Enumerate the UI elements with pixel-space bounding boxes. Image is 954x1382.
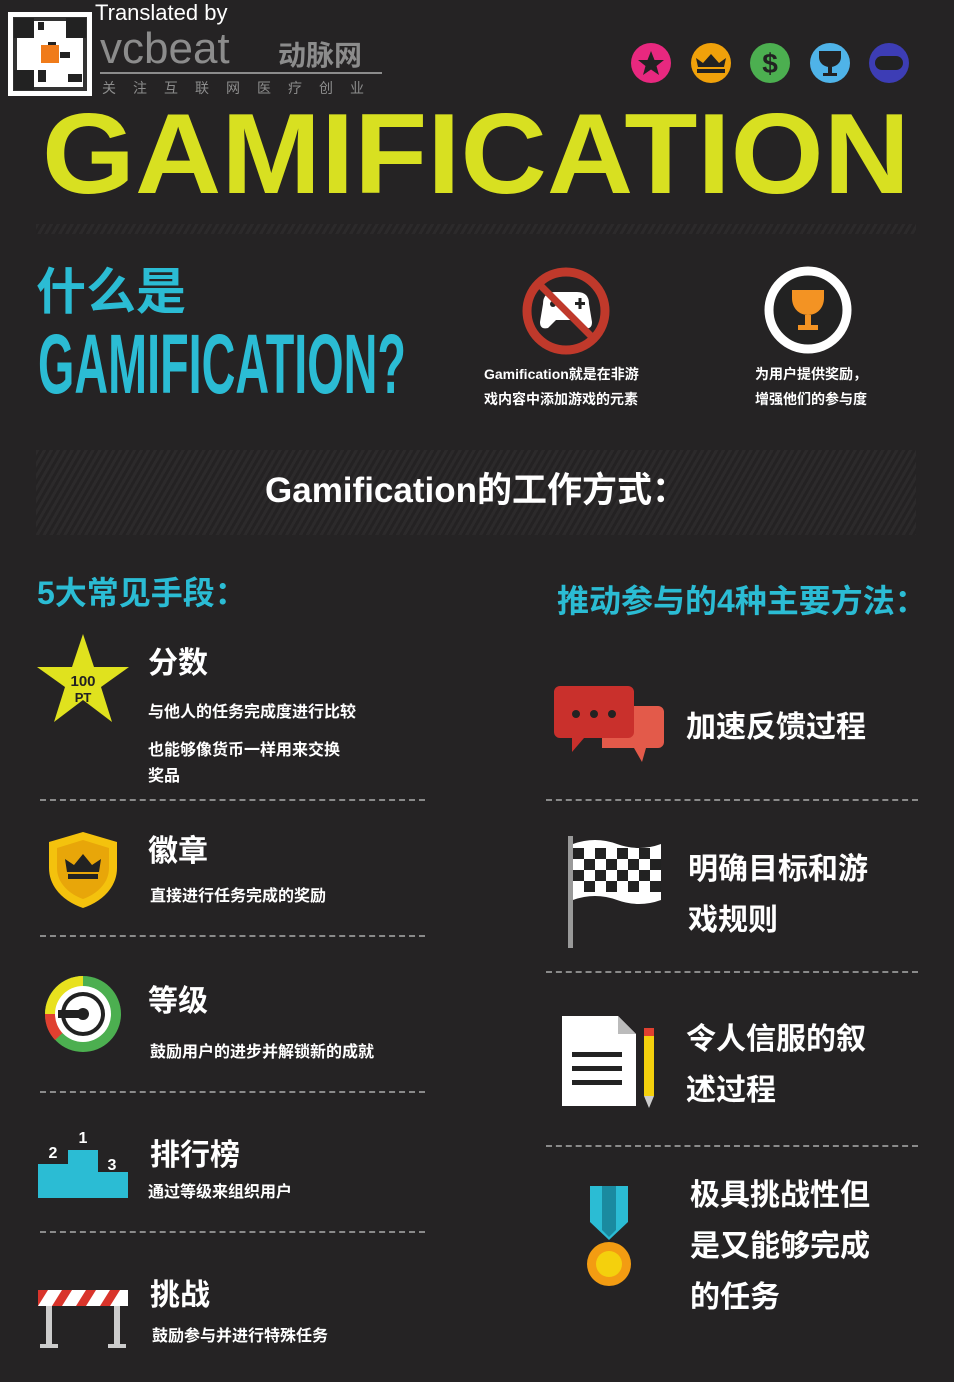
icon row [631,43,909,83]
item: badges: 直接进行任务完成的奖励 [150,888,326,905]
method: challenging tasks: 极具挑战性但 [690,1179,870,1212]
item: challenges [38,1279,328,1348]
heading: 4 methods: 推动参与的4种主要方法： [557,583,927,619]
banner: how it works [36,450,916,535]
QR code [8,12,92,96]
icon row: $ [762,48,778,79]
method: clear goals: 戏规则 [688,904,778,937]
item: leaderboard: 排行榜 [150,1139,240,1172]
item: levels: 鼓励用户的进步并解锁新的成就 [150,1044,374,1061]
text: rewards [755,366,867,407]
item: leaderboard: 2 [49,1145,58,1162]
method: clear goals: 明确目标和游 [688,853,868,886]
method: challenging tasks: 是又能够完成 [690,1230,870,1263]
item: levels [45,976,374,1061]
item: challenges: 鼓励参与并进行特殊任务 [152,1328,328,1345]
text: rewards: 为用户提供奖励， [755,366,867,382]
logo: vcbeat: 关注互联网医疗创业 [102,80,381,96]
item: points: 100 [70,673,96,690]
method: clear goals [568,836,868,948]
credit: translated by: Translated by [95,0,227,25]
method: fast feedback: 加速反馈过程 [686,711,866,744]
text: definition: Gamification就是在非游 [484,366,639,382]
item: leaderboard: 1 [79,1130,88,1147]
method: challenging tasks: 的任务 [690,1281,780,1314]
method: fast feedback [554,686,866,762]
item: leaderboard: 3 [108,1157,117,1174]
item: levels: 等级 [148,985,208,1018]
logo: vcbeat [100,24,382,96]
icon: no games [522,268,610,354]
text: rewards: 增强他们的参与度 [755,391,867,407]
heading: what is gamification: 什么是 [36,264,186,320]
item: badges: 徽章 [148,835,208,868]
heading: what is gamification [36,264,406,398]
logo: vcbeat: vcbeat [100,24,230,73]
icon: trophy [764,266,852,354]
text: definition [484,366,639,407]
method: challenging tasks [587,1179,870,1314]
method: narrative: 述过程 [686,1074,776,1107]
method: narrative: 令人信服的叙 [686,1023,866,1056]
item: points: 分数 [148,647,208,680]
item: points: 与他人的任务完成度进行比较 [148,704,356,721]
item: challenges: 挑战 [150,1279,210,1312]
item: leaderboard [38,1130,292,1201]
banner: how it works: Gamification的工作方式： [265,471,687,510]
item: badges [49,832,326,908]
item: points: PT [75,690,91,705]
item: leaderboard: 通过等级来组织用户 [148,1184,292,1201]
heading: 5 techniques: 5大常见手段： [37,575,247,611]
item: points: 奖品 [148,768,180,785]
logo: vcbeat: 动脉网 [278,40,362,71]
method: narrative [562,1016,866,1108]
text: definition: 戏内容中添加游戏的元素 [484,391,638,407]
item: points: 也能够像货币一样用来交换 [148,742,340,759]
item: points [37,634,356,785]
